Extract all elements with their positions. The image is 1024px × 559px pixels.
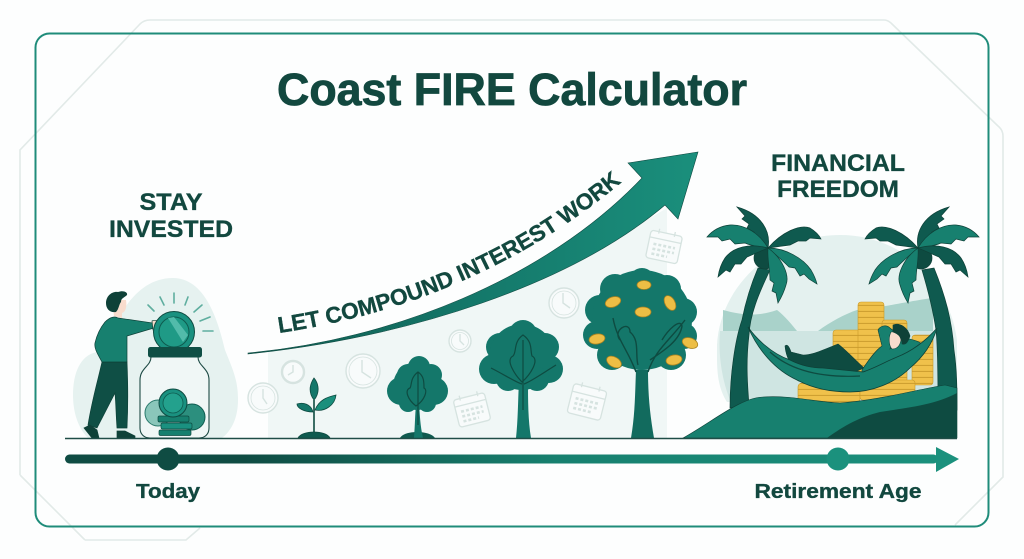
hammock <box>748 327 937 392</box>
heading: stay invested: STAY <box>140 189 202 216</box>
heading: financial freedom <box>771 150 905 203</box>
palm crown left <box>707 207 821 303</box>
hill shadow <box>827 393 957 438</box>
arrow label: LET COMPOUND INTEREST WORK <box>278 170 622 333</box>
tree: money tree <box>583 268 699 438</box>
label: retirement age: Retirement Age <box>754 481 922 503</box>
hill <box>683 385 957 438</box>
tree: medium <box>479 320 563 438</box>
head <box>106 291 127 318</box>
person resting <box>785 324 922 374</box>
palm crown right <box>865 207 979 303</box>
backdrop circle <box>717 235 957 402</box>
falling coin <box>154 312 194 352</box>
clocks <box>248 288 579 413</box>
coins inside jar <box>145 400 171 426</box>
heading: stay invested: INVESTED <box>109 216 233 243</box>
growth arrow <box>248 152 698 354</box>
label: today: Today <box>136 481 201 503</box>
panel: stay invested illustration <box>73 278 238 438</box>
sprout <box>297 378 336 438</box>
tree: small <box>387 356 448 438</box>
panel: growth background <box>268 208 667 438</box>
mountains <box>723 298 933 332</box>
heading: stay invested <box>109 189 233 243</box>
arrowhead <box>936 447 959 472</box>
timeline <box>65 447 959 472</box>
panel: financial freedom scene <box>683 207 979 438</box>
calendars <box>452 227 683 427</box>
coin rays <box>148 293 213 331</box>
coin stacks <box>798 302 933 403</box>
heading: financial freedom: FINANCIAL <box>771 150 905 177</box>
title: Coast FIRE Calculator <box>277 64 747 115</box>
jar <box>140 347 209 438</box>
retirement marker <box>826 448 850 470</box>
ground line <box>65 438 957 440</box>
water <box>719 331 945 400</box>
heading: financial freedom: FREEDOM <box>777 176 899 203</box>
today marker <box>156 448 180 470</box>
palm trunks <box>730 268 770 408</box>
person <box>84 317 161 438</box>
background blob <box>73 278 238 438</box>
